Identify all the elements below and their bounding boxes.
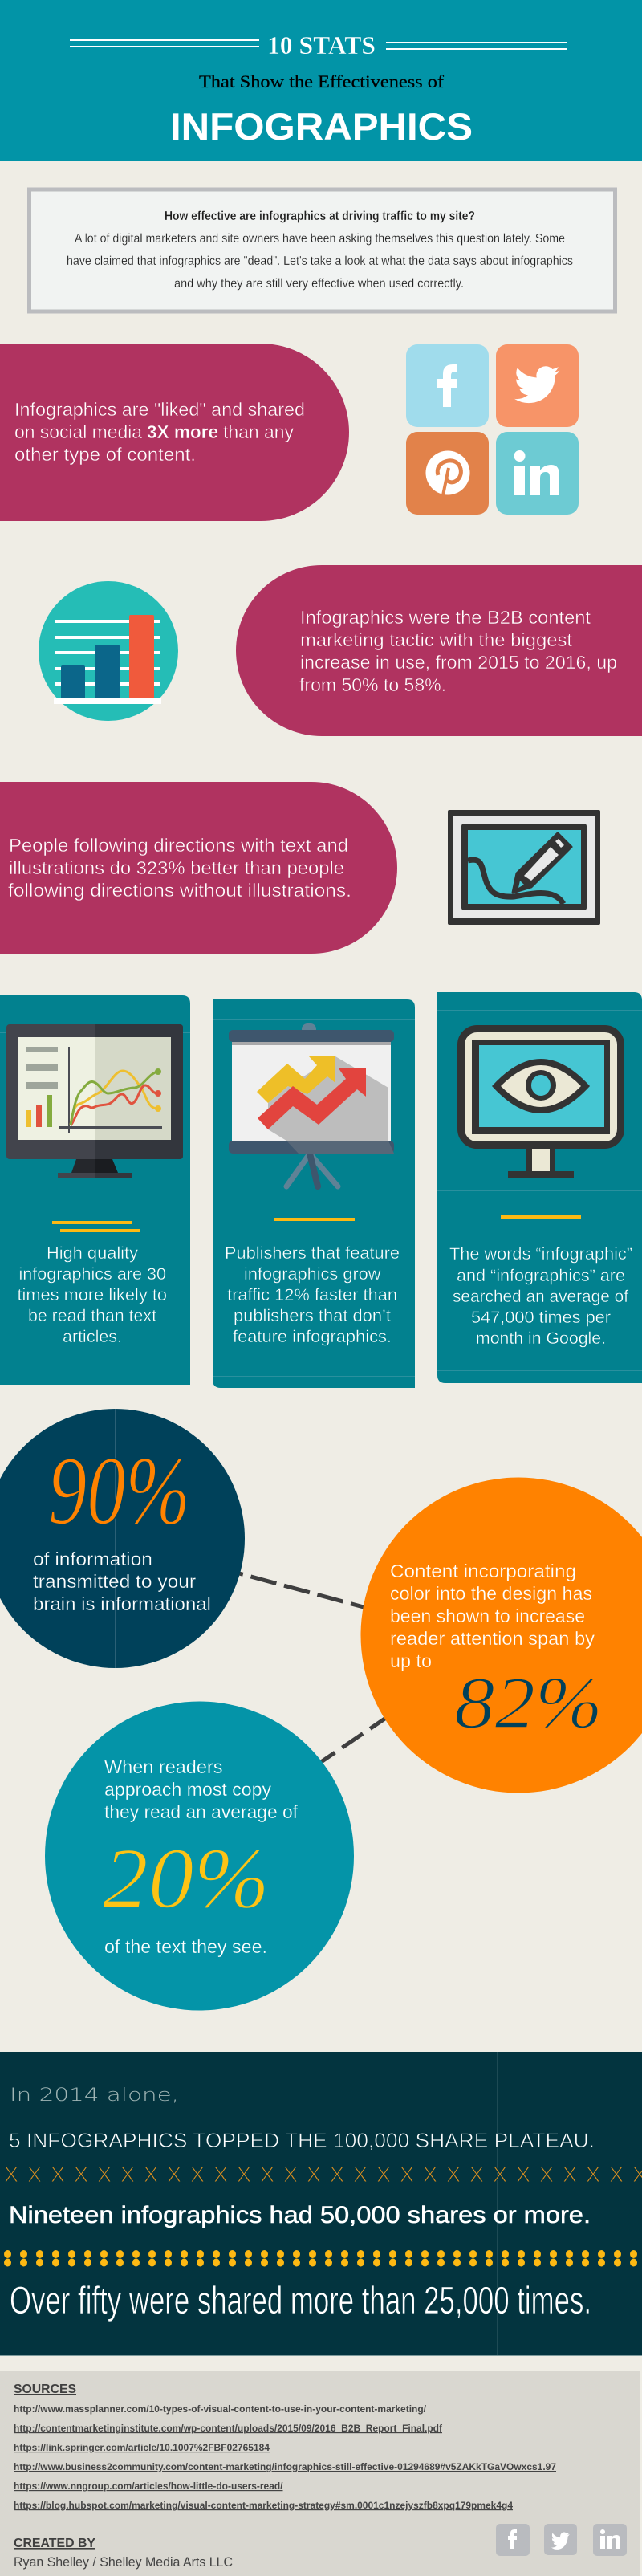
icon: monitor with chart <box>6 1024 183 1178</box>
icon: pinterest tile <box>406 432 489 515</box>
card text: be read than text <box>28 1307 156 1325</box>
intro text box: How effective are infographics at driving traffic to my site? <box>165 210 475 223</box>
panel: social media stat: on social media <box>14 421 142 442</box>
panel: card high quality infographics <box>0 995 190 1385</box>
card text <box>449 1245 632 1348</box>
panel: card google searches <box>437 992 642 1383</box>
intro text box <box>29 189 615 311</box>
icon: projector screen with arrows <box>229 1023 394 1186</box>
panel: social media stat: than any <box>223 421 294 442</box>
panel: social media stat: Infographics are "liked" and shared <box>14 399 305 420</box>
circle: 20 percent stat: they read an average of <box>104 1801 299 1822</box>
heading: created by: CREATED BY <box>14 2537 95 2550</box>
panel: social media stat <box>0 344 349 521</box>
panel: B2B stat <box>236 565 642 736</box>
creator name: Ryan Shelley / Shelley Media Arts LLC <box>14 2554 233 2570</box>
circle: 82 percent stat: up to <box>390 1650 432 1671</box>
card text: traffic 12% faster than <box>227 1286 397 1304</box>
card text: articles. <box>63 1328 122 1346</box>
panel: B2B stat: increase in use, from 2015 to 2016, up <box>300 652 617 673</box>
divider: row of x marks: XXXXXXXXXXXXXXXXXXXXXXXXXXXX <box>4 2163 642 2187</box>
circle: 20 percent stat: of the text they see. <box>104 1936 267 1957</box>
circle: 82 percent stat: Content incorporating <box>390 1561 576 1581</box>
source links: https://www.nngroup.com/articles/how-little-do-users-read/ <box>14 2480 283 2492</box>
icon: footer facebook <box>496 2524 530 2556</box>
source links: http://www.massplanner.com/10-types-of-visual-content-to-use-in-your-content-marketing/ <box>14 2403 427 2415</box>
main title: INFOGRAPHICS <box>170 105 473 148</box>
panel: social media stat: other type of content. <box>14 444 196 465</box>
card text: publishers that don’t <box>234 1307 391 1325</box>
circle: 90 percent stat <box>0 1409 245 1668</box>
subtitle: That Show the Effectiveness of <box>199 71 445 92</box>
icon: linkedin tile <box>496 432 579 515</box>
dashed connector lines <box>239 1573 386 1762</box>
panel: illustrations stat: illustrations do 323% better than people <box>9 857 344 878</box>
circle: 20 percent stat: When readers <box>104 1756 223 1777</box>
circle: 82 percent stat <box>361 1477 642 1793</box>
card text: feature infographics. <box>233 1328 392 1346</box>
card text: Publishers that feature <box>225 1244 400 1263</box>
circle: 82 percent stat: been shown to increase <box>390 1605 585 1626</box>
card text: and “infographics” are <box>457 1267 625 1285</box>
card text: searched an average of <box>453 1288 628 1306</box>
circle: 90 percent stat: transmitted to your <box>33 1571 196 1592</box>
source links: http://contentmarketinginstitute.com/wp-content/uploads/2015/09/2016_B2B_Report_Final.pdf <box>14 2423 443 2434</box>
panel: B2B stat: from 50% to 58%. <box>299 674 446 695</box>
intro text box: A lot of digital marketers and site owners have been asking themselves this question lately. Some <box>75 232 565 246</box>
source links: https://link.springer.com/article/10.1007%2FBF02765184 <box>14 2442 270 2453</box>
icon: footer twitter <box>544 2524 577 2555</box>
circle: 82 percent stat: color into the design has <box>390 1583 592 1604</box>
icon: pen drawing on tablet <box>448 810 600 925</box>
text: nineteen infographics: Nineteen infographics had 50,000 shares or more. <box>9 2202 591 2228</box>
card text: 547,000 times per <box>471 1308 611 1327</box>
icon: facebook tile <box>406 344 489 427</box>
panel: illustrations stat <box>0 782 397 954</box>
icon: monitor with eye <box>461 1029 621 1178</box>
panel: B2B stat: Infographics were the B2B content <box>300 607 591 628</box>
card text <box>225 1244 400 1346</box>
source links: https://blog.hubspot.com/marketing/visual-content-marketing-strategy#sm.0001c1nzejyszfb8xpq179pmek4g4 <box>14 2500 513 2511</box>
circle: 82 percent stat: reader attention span by <box>390 1628 595 1649</box>
circle: 90 percent stat: brain is informational <box>33 1593 211 1614</box>
circle: 20 percent stat <box>45 1702 354 2010</box>
title: 10 stats with double rules: 10 STATS <box>267 31 376 59</box>
accent rule <box>501 1215 581 1219</box>
circle: 90 percent stat: 90% <box>48 1437 190 1545</box>
heading: sources: SOURCES <box>14 2383 76 2396</box>
accent rule <box>274 1218 355 1221</box>
card text: The words “infographic” <box>449 1245 632 1264</box>
card text <box>18 1244 167 1346</box>
icon: bar chart circle <box>39 581 178 721</box>
card text: infographics grow <box>244 1265 381 1284</box>
icon: twitter tile <box>496 344 579 427</box>
intro text box: and why they are still very effective when used correctly. <box>174 277 464 291</box>
source links <box>14 2403 556 2511</box>
panel: illustrations stat: People following directions with text and <box>9 835 348 856</box>
divider: row of yellow dots <box>0 2250 642 2267</box>
card text: High quality <box>47 1244 139 1263</box>
circle: 20 percent stat: 20% <box>103 1831 270 1927</box>
text: top infographics: 5 INFOGRAPHICS TOPPED THE 100,000 SHARE PLATEAU. <box>9 2130 595 2152</box>
accent rules <box>52 1221 140 1232</box>
icon: footer linkedin <box>593 2524 627 2556</box>
circle: 82 percent stat: 82% <box>454 1662 603 1744</box>
card text: month in Google. <box>476 1329 606 1348</box>
panel: social media stat: 3X more <box>147 421 218 442</box>
text: in 2014 alone: In 2014 alone, <box>10 2086 179 2106</box>
panel: illustrations stat: following directions without illustrations. <box>8 880 351 901</box>
panel: share statistics band <box>0 2052 642 2356</box>
card text: times more likely to <box>18 1286 167 1304</box>
header banner <box>0 0 642 161</box>
card text: infographics are 30 <box>19 1265 166 1284</box>
circle: 20 percent stat: approach most copy <box>104 1779 271 1800</box>
source links: http://www.business2community.com/content-marketing/infographics-still-effective-01294689#v5ZAKkTGaVOwxcs1.97 <box>14 2461 556 2472</box>
panel: card publishers <box>213 999 415 1388</box>
panel: footer sources <box>0 2371 640 2576</box>
panel: B2B stat: marketing tactic with the biggest <box>300 629 573 650</box>
circle: 90 percent stat: of information <box>33 1548 152 1569</box>
intro text box: have claimed that infographics are "dead". Let's take a look at what the data says about infographics <box>67 254 573 268</box>
